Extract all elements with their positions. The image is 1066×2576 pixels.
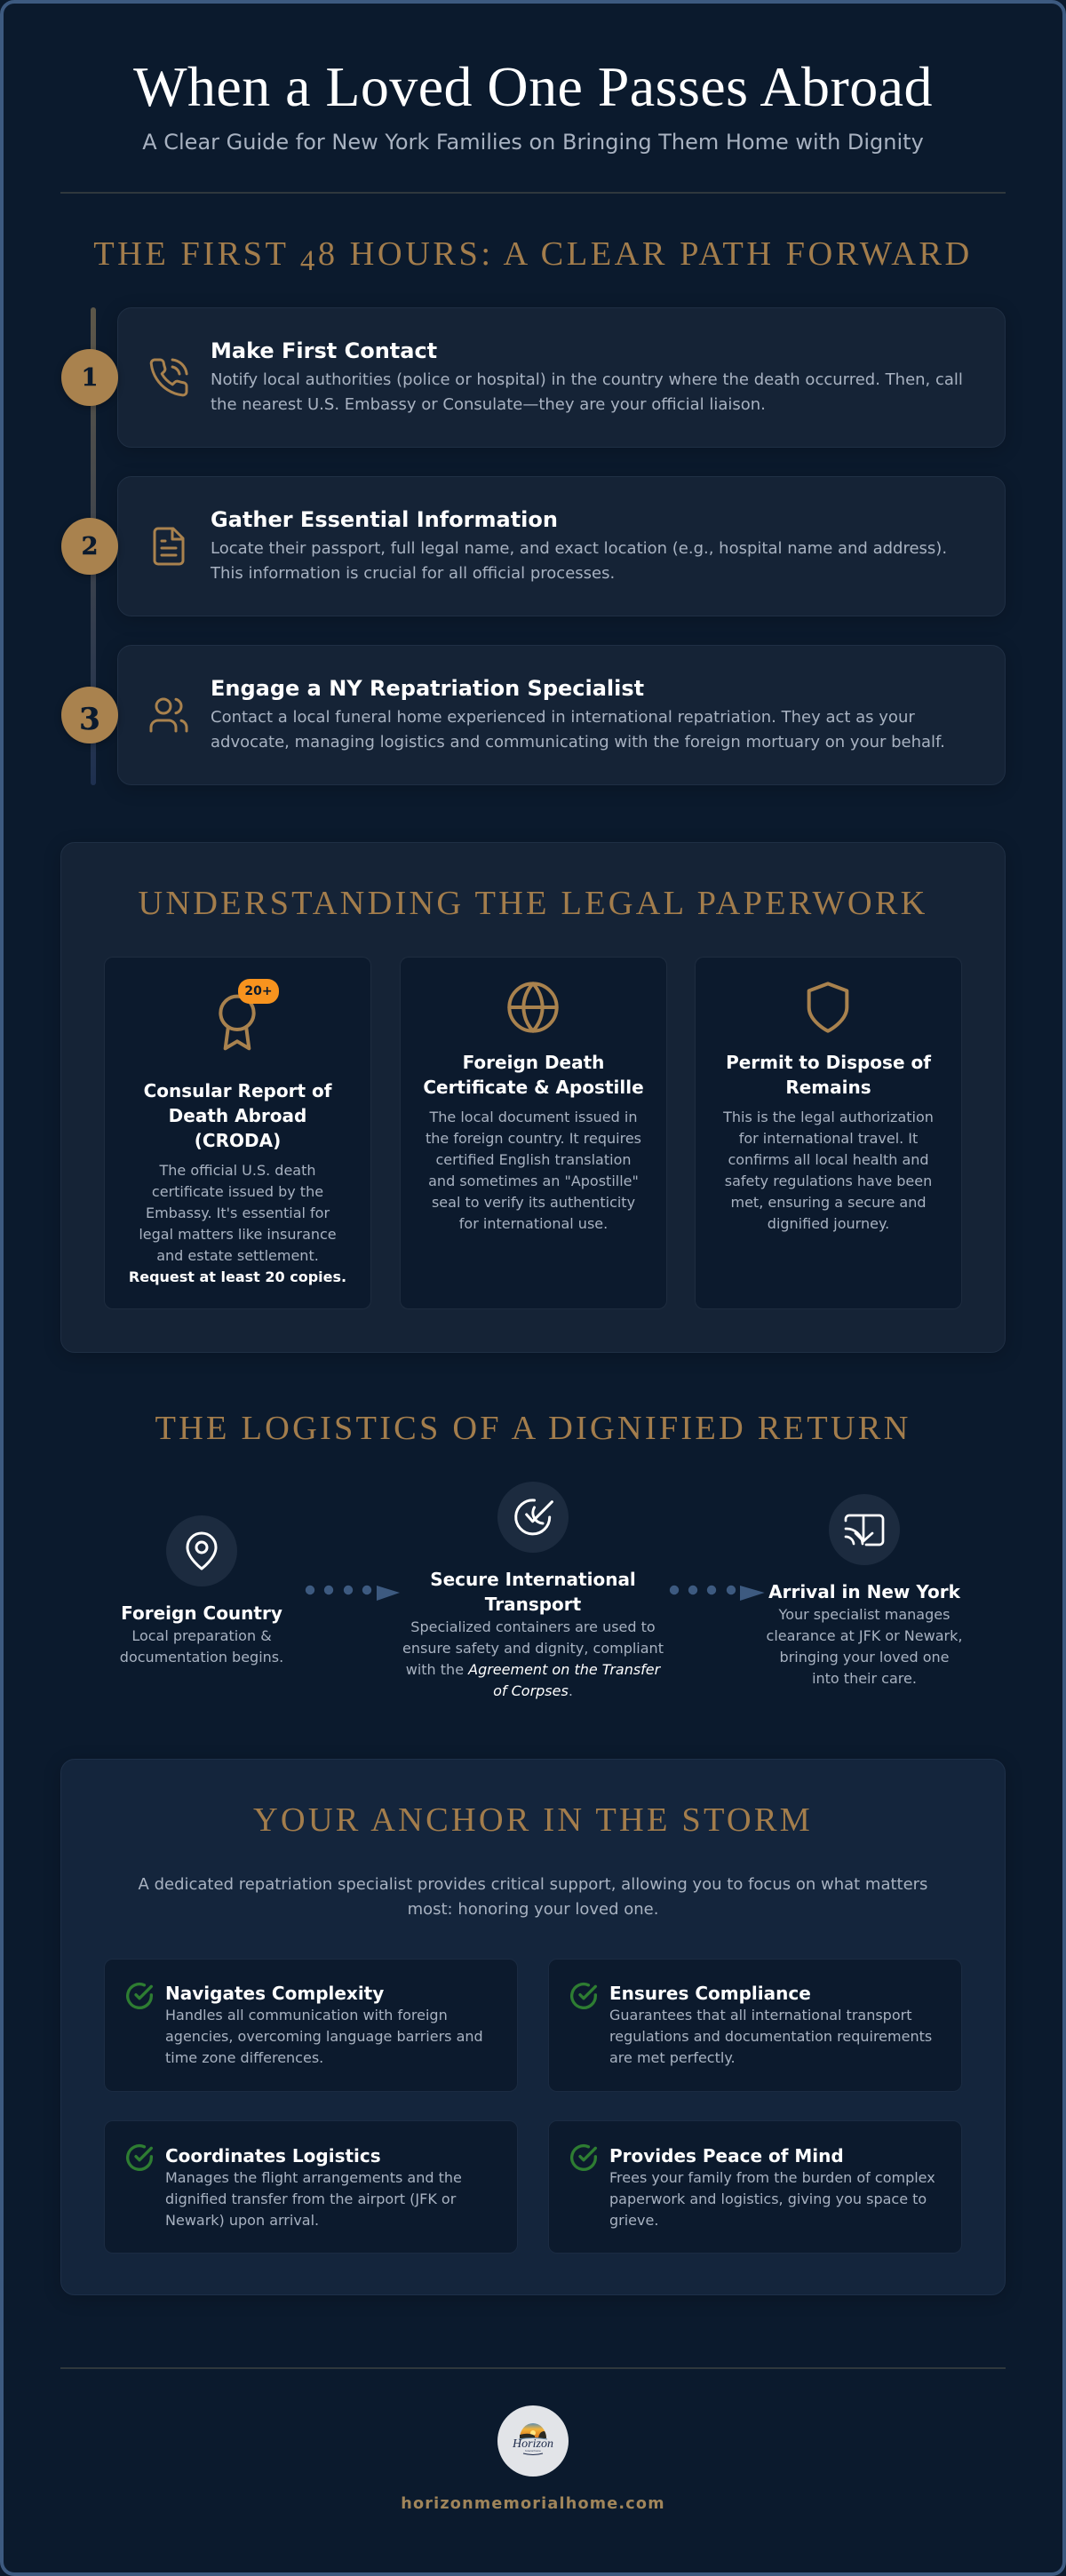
benefit text: paperwork and logistics, giving you space to: [609, 2190, 927, 2207]
step 2 number: 2: [82, 533, 98, 561]
icon: check: [570, 1983, 597, 2009]
permit text: [723, 1109, 934, 1232]
section heading: anchor: YOUR ANCHOR IN THE STORM: [253, 1801, 813, 1839]
benefit text: Manages the flight arrangements and the: [165, 2169, 462, 2186]
icon: globe: [507, 982, 559, 1033]
icon: map pin: [166, 1515, 237, 1586]
benefit text: Frees your family from the burden of complex: [609, 2169, 935, 2186]
certificate text: the foreign country. It requires: [426, 1130, 641, 1147]
step 3 text: advocate, managing logistics and communicating with the foreign mortuary on your behalf.: [211, 733, 945, 751]
icon: check: [126, 2144, 153, 2171]
arrow 2: [670, 1585, 764, 1601]
benefit text: are met perfectly.: [609, 2049, 736, 2066]
intro text: most: honoring your loved one.: [408, 1900, 658, 1919]
website: horizonmemorialhome.com: [401, 2495, 665, 2513]
stage text: Your specialist manages: [779, 1606, 950, 1623]
certificate text: The local document issued in: [430, 1109, 637, 1125]
benefit: navigates complexity: [104, 1959, 518, 2092]
card: foreign death certificate: [400, 957, 667, 1309]
benefit text: Guarantees that all international transport: [609, 2007, 911, 2023]
stage heading: Secure International: [430, 1569, 636, 1590]
panel: legal paperwork: [60, 842, 1006, 1353]
icon: secure check: [497, 1482, 569, 1553]
step 1 card: [117, 307, 1006, 448]
section heading: first 48 hours: THE FIRST 48 HOURS: A CLEAR PATH FORWARD: [93, 235, 973, 277]
permit heading: [726, 1052, 931, 1098]
benefit text: Newark) upon arrival.: [165, 2212, 319, 2229]
benefit text: [609, 2169, 935, 2229]
logistics stage: arrival: [767, 1494, 962, 1687]
benefit heading: Coordinates Logistics: [165, 2145, 381, 2167]
badge: 20+: 20+: [244, 984, 273, 998]
CRODA text: Request at least 20 copies.: [129, 1268, 346, 1285]
step 3 text: Contact a local funeral home experienced in international repatriation. They act as your: [211, 708, 915, 727]
stage text: bringing your loved one: [780, 1649, 949, 1666]
icon: document: [153, 528, 185, 565]
benefit text: dignified transfer from the airport (JFK or: [165, 2190, 456, 2207]
stage text: into their care.: [812, 1670, 917, 1687]
stage text: [402, 1618, 664, 1699]
step 3 text: [211, 708, 945, 751]
logo: Horizon: [512, 2437, 553, 2451]
stage text: Specialized containers are used to: [410, 1618, 656, 1635]
benefit text: [165, 2169, 462, 2229]
panel: anchor in the storm: [60, 1759, 1006, 2295]
CRODA text: Embassy. It's essential for: [146, 1205, 330, 1221]
timeline line: [91, 307, 96, 785]
certificate text: seal to verify its authenticity: [432, 1194, 635, 1211]
title: When a Loved One Passes Abroad: [133, 55, 933, 118]
benefit text: regulations and documentation requirements: [609, 2028, 932, 2045]
step 1 number: 1: [82, 364, 98, 392]
step 2 text: Locate their passport, full legal name, and exact location (e.g., hospital name and address).: [211, 539, 947, 558]
CRODA text: certificate issued by the: [152, 1183, 323, 1200]
stage text: with the Agreement on the Transfer: [406, 1661, 660, 1678]
CRODA heading: (CRODA): [195, 1130, 281, 1151]
benefit text: Handles all communication with foreign: [165, 2007, 448, 2023]
step 2 text: [210, 539, 947, 583]
intro text: [139, 1875, 927, 1919]
stage heading: Transport: [485, 1594, 581, 1615]
step 3 number: [61, 687, 118, 743]
certificate text: [426, 1109, 641, 1232]
stage text: of Corpses.: [493, 1682, 573, 1699]
CRODA text: and estate settlement.: [156, 1247, 319, 1264]
stage text: [120, 1627, 283, 1666]
step 2 number: [61, 518, 118, 575]
card: CRODA: [104, 957, 371, 1309]
step 2 text: This information is crucial for all official processes.: [211, 564, 615, 583]
subtitle: A Clear Guide for New York Families on Bringing Them Home with Dignity: [142, 130, 924, 155]
stage text: clearance at JFK or Newark,: [767, 1627, 962, 1644]
stage heading: [430, 1569, 636, 1615]
CRODA heading: Consular Report of: [144, 1080, 331, 1101]
certificate text: certified English translation: [435, 1151, 631, 1168]
permit heading: Remains: [785, 1077, 871, 1098]
CRODA heading: [144, 1080, 332, 1151]
permit text: This is the legal authorization: [723, 1109, 934, 1125]
permit text: dignified journey.: [768, 1215, 889, 1232]
stage text: [767, 1606, 962, 1687]
CRODA text: [129, 1162, 346, 1285]
logo: funeral home: [525, 2449, 541, 2453]
arrow 1: [306, 1585, 400, 1601]
permit text: for international travel. It: [739, 1130, 918, 1147]
section heading: logistics: THE LOGISTICS OF A DIGNIFIED RETURN: [155, 1410, 911, 1447]
benefit heading: Provides Peace of Mind: [609, 2145, 844, 2167]
step 1 heading: Make First Contact: [211, 338, 437, 363]
benefit heading: Ensures Compliance: [609, 1983, 811, 2004]
step 3 number: 3: [79, 702, 100, 737]
stage heading: Foreign Country: [121, 1602, 282, 1624]
permit text: met, ensuring a secure and: [730, 1194, 926, 1211]
benefit text: [609, 2007, 932, 2066]
certificate text: for international use.: [459, 1215, 608, 1232]
certificate heading: Certificate & Apostille: [423, 1077, 644, 1098]
CRODA text: The official U.S. death: [159, 1162, 316, 1179]
icon: check: [570, 2144, 597, 2171]
stage text: ensure safety and dignity, compliant: [402, 1640, 664, 1657]
stage text: Local preparation &: [131, 1627, 272, 1644]
certificate heading: [423, 1052, 644, 1098]
icon: award: [219, 995, 256, 1050]
logo: [497, 2405, 569, 2477]
benefit text: grieve.: [609, 2212, 658, 2229]
CRODA text: legal matters like insurance: [139, 1226, 337, 1243]
icon: people: [149, 698, 188, 732]
benefit: coordinates logistics: [104, 2120, 518, 2254]
intro text: A dedicated repatriation specialist provides critical support, allowing you to focus on what matters: [139, 1875, 927, 1894]
logistics stage: foreign country: [120, 1515, 283, 1666]
logistics stage: transport: [402, 1482, 664, 1699]
benefit text: time zone differences.: [165, 2049, 323, 2066]
certificate text: and sometimes an "Apostille": [428, 1173, 639, 1189]
benefit text: agencies, overcoming language barriers and: [165, 2028, 483, 2045]
step 1 number: [61, 349, 118, 406]
stage text: documentation begins.: [120, 1649, 283, 1666]
benefit heading: Navigates Complexity: [165, 1983, 384, 2004]
step 1 text: Notify local authorities (police or hospital) in the country where the death occurred. Then, call: [211, 370, 963, 389]
step 3 card: [117, 645, 1006, 785]
step 3 heading: Engage a NY Repatriation Specialist: [211, 676, 644, 701]
icon: arrival: [829, 1494, 900, 1565]
step 2 card: [117, 476, 1006, 616]
permit heading: Permit to Dispose of: [726, 1052, 931, 1073]
benefit: peace of mind: [548, 2120, 962, 2254]
icon: check: [126, 1983, 153, 2009]
permit text: confirms all local health and: [728, 1151, 929, 1168]
icon: phone call: [149, 359, 188, 396]
icon: shield: [807, 982, 849, 1033]
badge: 20+: [238, 979, 279, 1004]
stage heading: Arrival in New York: [768, 1581, 960, 1602]
CRODA heading: Death Abroad: [169, 1105, 306, 1126]
benefit: ensures compliance: [548, 1959, 962, 2092]
benefit text: [165, 2007, 483, 2066]
step 2 heading: Gather Essential Information: [211, 507, 558, 532]
step 1 text: the nearest U.S. Embassy or Consulate—they are your official liaison.: [211, 395, 766, 414]
section heading: paperwork: UNDERSTANDING THE LEGAL PAPERWORK: [138, 885, 928, 922]
certificate heading: Foreign Death: [463, 1052, 604, 1073]
permit text: safety regulations have been: [725, 1173, 932, 1189]
step 1 text: [211, 370, 963, 414]
card: permit to dispose: [695, 957, 962, 1309]
